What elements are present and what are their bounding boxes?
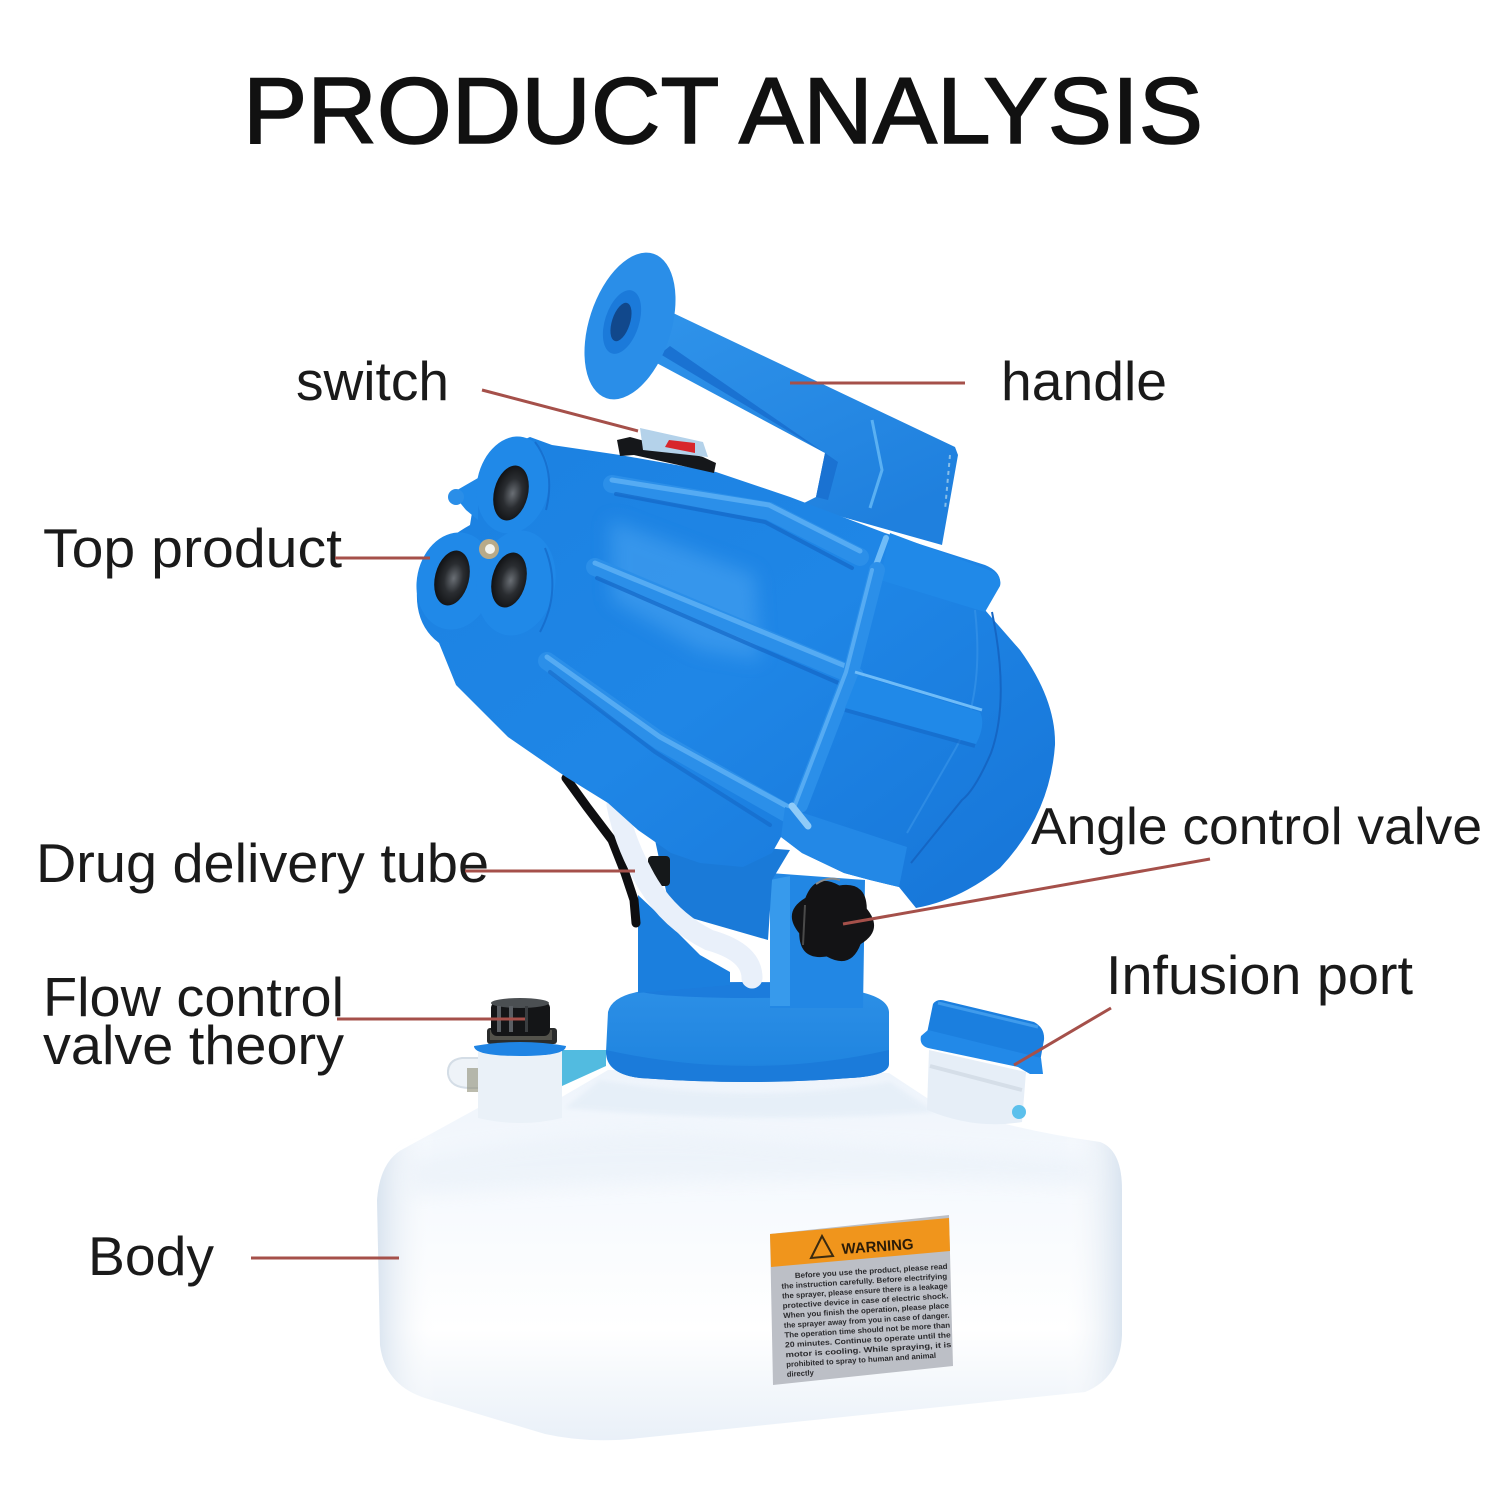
warning body text: the instruction carefully. Before electrifying	[781, 1272, 948, 1291]
front face with three nozzles	[408, 430, 565, 643]
warning body text: motor is cooling. While spraying, it is	[785, 1340, 952, 1359]
warning body text: protective device in case of electric shock.	[782, 1291, 949, 1310]
handle with disc	[568, 241, 958, 545]
label: infusion port: Infusion port	[1106, 944, 1413, 1006]
stand collar	[606, 982, 889, 1082]
drug delivery white tube	[617, 805, 752, 978]
rear cap seam	[911, 612, 1001, 863]
lower junction	[781, 807, 907, 887]
flow control port	[448, 998, 566, 1123]
stand uprights	[638, 873, 865, 1008]
neck	[655, 840, 790, 940]
label: switch	[296, 350, 638, 431]
label: handle: handle	[1001, 350, 1167, 412]
label: flow control valve theory: valve theory	[43, 1014, 344, 1076]
label: infusion port	[1014, 944, 1413, 1065]
center metal screw	[479, 539, 499, 559]
dark connector	[648, 856, 670, 886]
body highlight	[610, 520, 760, 660]
rib middle	[595, 567, 855, 676]
title: PRODUCT ANALYSIS	[243, 58, 1203, 163]
label: switch: switch	[296, 350, 449, 412]
warning body text: the sprayer away from you in case of danger.	[784, 1311, 950, 1330]
lower block rib	[845, 675, 982, 744]
rib upper	[612, 484, 860, 557]
label: angle control valve	[843, 798, 1482, 924]
water tank body	[377, 1070, 1122, 1440]
product illustration: fogger sprayer	[377, 241, 1122, 1440]
vertical band	[800, 570, 877, 805]
black cable	[566, 778, 636, 923]
warning body text: directly	[787, 1368, 815, 1379]
label: body: Body	[88, 1225, 214, 1287]
right nozzle	[486, 549, 532, 611]
warning heading: WARNING	[841, 1236, 914, 1258]
angle control knob	[792, 879, 874, 961]
switch	[617, 428, 716, 473]
warning body text: prohibited to spray to human and animal	[786, 1351, 936, 1369]
motor head body	[417, 437, 1055, 908]
warning body text: When you finish the operation, please place	[783, 1301, 949, 1320]
warning body text: 20 minutes. Continue to operate until the	[785, 1330, 951, 1349]
warning triangle icon	[811, 1236, 833, 1258]
warning body text: The operation time should not be more than	[784, 1321, 951, 1340]
infusion port	[921, 1000, 1044, 1124]
warning body text	[781, 1262, 954, 1379]
label: top product: Top product	[43, 517, 342, 579]
label: drug delivery tube: Drug delivery tube	[36, 832, 489, 894]
warning body text: Before you use the product, please read	[795, 1262, 948, 1280]
teal tank insert	[562, 1050, 606, 1086]
left nozzle	[429, 547, 475, 609]
warning body text: the sprayer, please ensure there is a leakage	[782, 1281, 948, 1301]
label: flow control valve theory: Flow control	[43, 966, 344, 1028]
upper block rib	[880, 533, 1000, 612]
rib lower	[547, 661, 790, 815]
top nozzle	[488, 462, 534, 524]
warning label	[770, 1215, 954, 1385]
label: angle control valve: Angle control valve	[1031, 798, 1482, 856]
label: flow control valve theory	[43, 966, 525, 1076]
